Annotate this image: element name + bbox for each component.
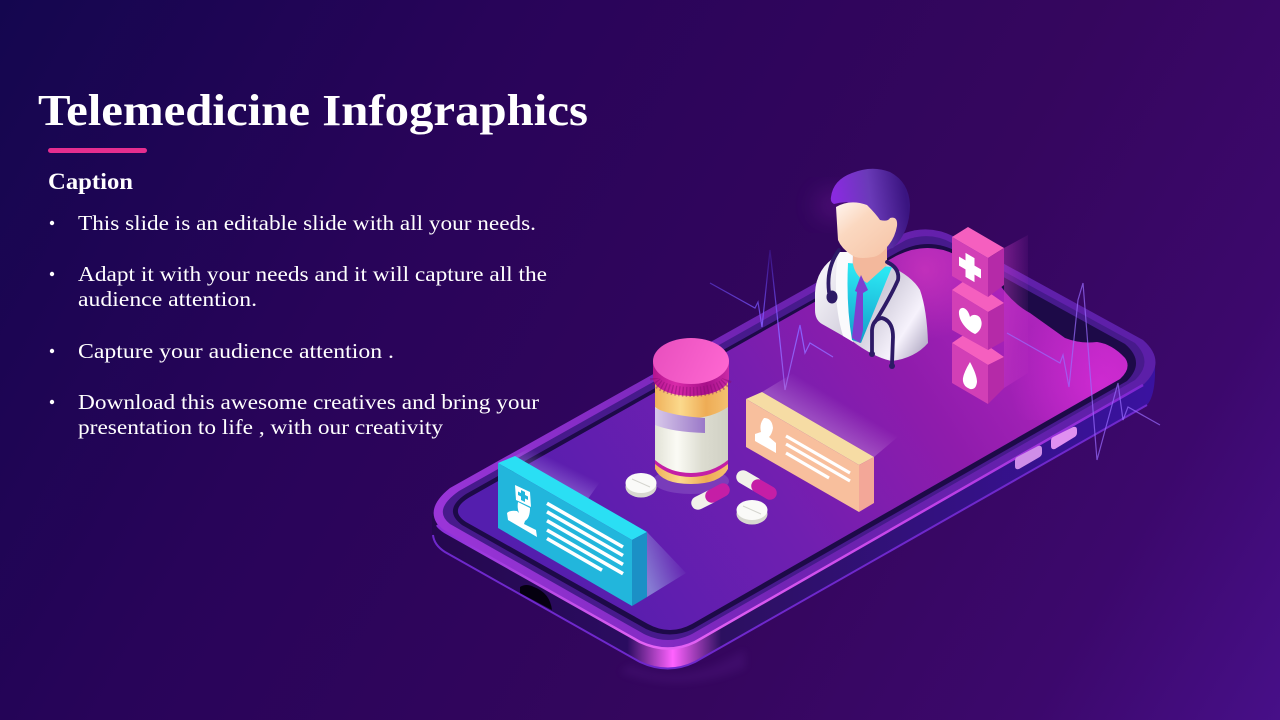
doctor glow	[815, 191, 855, 219]
phone floor shadow	[620, 650, 745, 683]
bullet 3: Capture your audience attention .	[78, 339, 394, 363]
black bezel	[453, 244, 1136, 634]
cube bottom	[952, 332, 1004, 404]
neck	[853, 247, 887, 283]
bottle lid side	[653, 361, 729, 396]
nurse cap cross	[518, 490, 528, 502]
bullet 2	[50, 262, 547, 311]
title underline	[48, 148, 147, 153]
nurse icon	[507, 485, 537, 537]
side button 1	[1015, 446, 1042, 469]
rim bottom highlight	[437, 385, 1143, 648]
title: Telemedicine Infographics	[38, 86, 588, 135]
coat left lapel	[836, 252, 853, 342]
blue card beams	[515, 445, 686, 597]
shirt	[848, 263, 892, 343]
doctor figure	[815, 169, 928, 369]
bottle magenta band	[655, 460, 728, 477]
capsule upper	[743, 477, 770, 493]
blue info card	[498, 456, 647, 606]
phone lower outline	[433, 405, 1147, 668]
card front face	[498, 463, 632, 606]
bullet 2: Adapt it with your needs and it will capture all the	[78, 262, 547, 286]
bottom speaker notch	[520, 585, 552, 610]
bullet 2: audience attention.	[78, 287, 257, 311]
caption text block	[48, 169, 547, 439]
screen	[458, 248, 1128, 630]
bullet 4: Download this awesome creatives and bring your	[78, 390, 539, 414]
card side face	[632, 532, 647, 606]
person icon	[755, 418, 776, 453]
lid ridges	[655, 378, 727, 392]
phone body side	[432, 363, 1155, 668]
tablet right	[736, 500, 768, 524]
peach card glow	[762, 372, 900, 457]
cube top	[952, 227, 1004, 297]
card front face	[746, 399, 859, 512]
tablet left	[626, 473, 656, 498]
heart icon	[959, 308, 982, 334]
heartbeat line left	[710, 250, 833, 390]
bullet 1: This slide is an editable slide with all your needs.	[78, 211, 536, 235]
bottle lid top	[653, 338, 729, 384]
heartbeat line right	[1007, 283, 1160, 460]
card text lines	[547, 503, 623, 574]
card top face	[498, 456, 647, 540]
caption heading: Caption	[48, 169, 133, 194]
face	[836, 202, 897, 258]
bottle white body	[655, 407, 728, 476]
medical cubes	[952, 227, 1028, 404]
bullet 4: presentation to life , with our creativity	[78, 415, 443, 439]
phone rim	[434, 229, 1156, 648]
stethoscope ear tips	[869, 351, 895, 369]
hair	[831, 169, 910, 250]
lab coat	[815, 250, 928, 361]
side button 2	[1051, 427, 1077, 449]
capsule lower	[698, 490, 723, 503]
stethoscope chest piece	[826, 290, 838, 304]
tie	[852, 275, 868, 343]
card text lines	[786, 436, 850, 481]
rim inner band	[443, 236, 1144, 640]
bottle base reflection	[653, 468, 729, 494]
card side face	[859, 457, 874, 512]
drop icon	[963, 362, 977, 389]
pill bottle	[653, 338, 729, 494]
bottle label	[655, 408, 705, 433]
stethoscope	[828, 250, 898, 364]
peach info card	[746, 392, 874, 512]
screen glows	[888, 248, 1128, 420]
smartphone illustration	[432, 200, 1156, 683]
bullet 4	[50, 390, 539, 439]
cube glow	[1004, 235, 1028, 388]
cube middle	[952, 278, 1004, 350]
card top face	[746, 392, 874, 465]
bottle base	[655, 372, 728, 484]
cross icon	[959, 253, 981, 282]
